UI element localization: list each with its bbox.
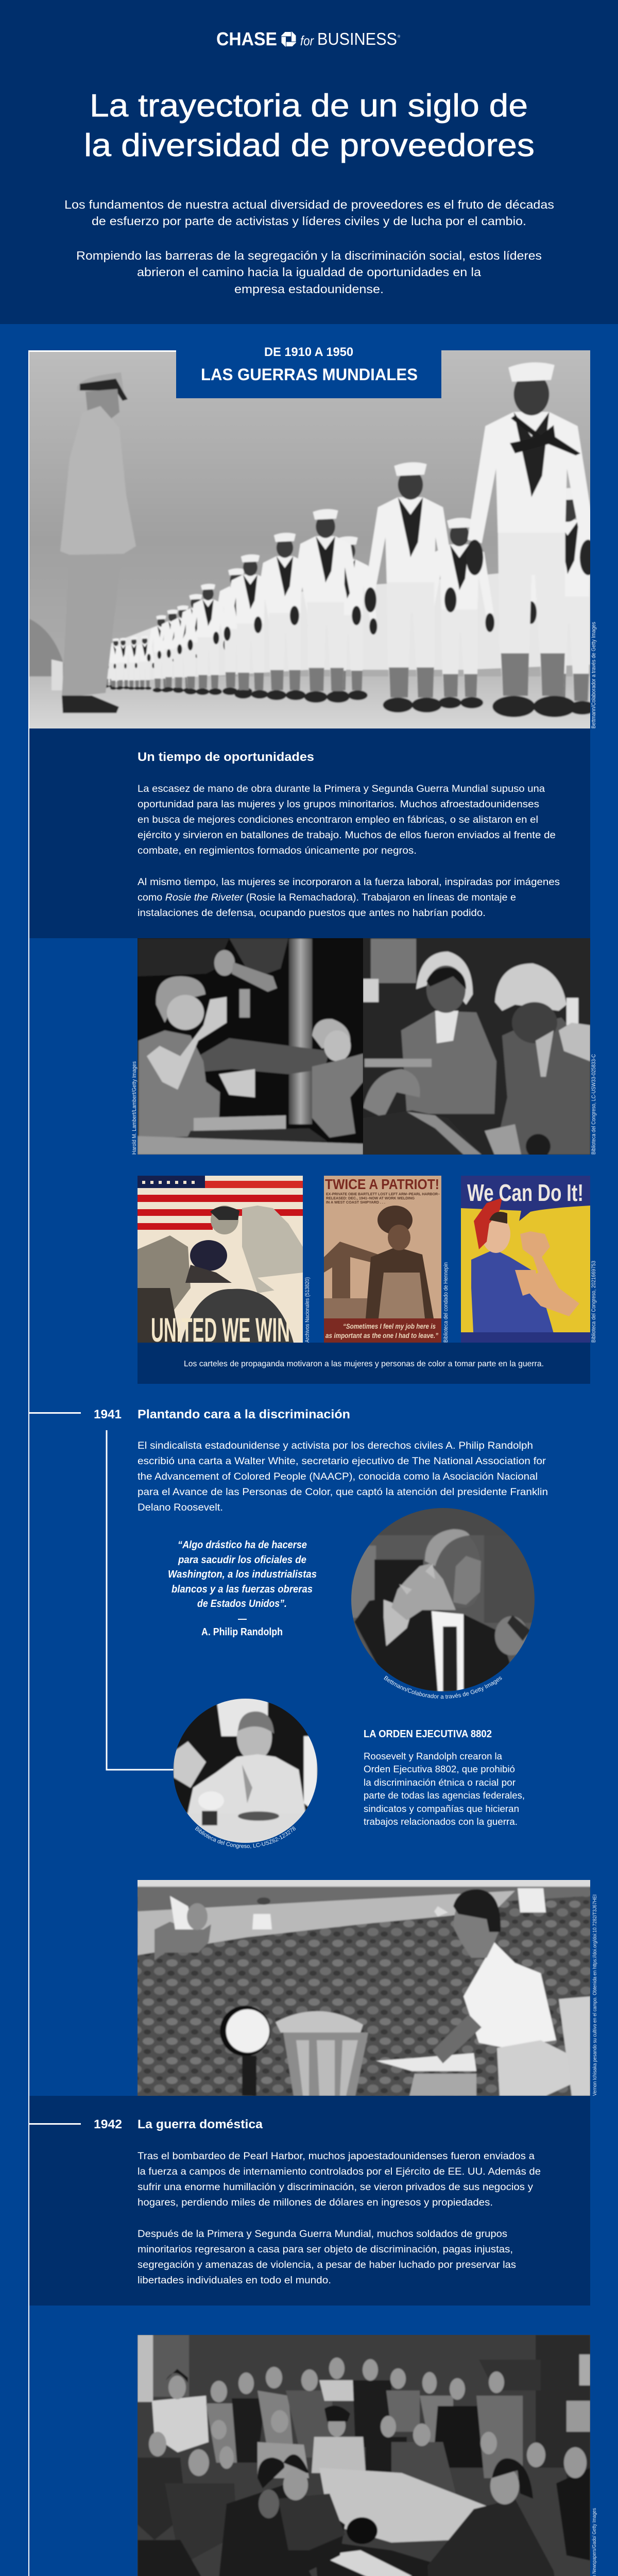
text block: orden ejecutiva: trabajos relacionados con la guerra. [364, 1817, 518, 1827]
text block: Después de la Primera y Segunda Guerra Mundial, muchos soldados de grupos [138, 2229, 507, 2240]
poster lettering: We Can Do It! [467, 1179, 583, 1206]
photo: Roosevelt signing [170, 1695, 322, 1850]
logo: Chase for Business: BUSINESS [317, 29, 397, 48]
timeline marker 1942 [28, 2123, 81, 2125]
poster small text: EX-PRIVATE OBIE BARTLETT LOST LEFT ARM–PEARL HARBOR– [326, 1193, 440, 1196]
text block: orden ejecutiva: parte de todas las agencias federales, [364, 1790, 525, 1801]
text block: minoritarios regresaron a casa para ser objeto de discriminación, pagas injustas, [138, 2244, 513, 2255]
text block: en busca de mejores condiciones encontraron empleo en fábricas, o se alistaron en el [138, 815, 538, 825]
foreground sailor scarf [510, 415, 580, 455]
photo: group of women at a table [134, 2331, 592, 2576]
poster headline: TWICE A PATRIOT! [325, 1176, 439, 1192]
text block: La escasez de mano de obra durante la Primera y Segunda Guerra Mundial supuso una [138, 784, 545, 794]
quote: Randolph: de Estados Unidos”. [197, 1598, 287, 1609]
photo: women at drill press [134, 935, 366, 1157]
top rule [28, 350, 258, 352]
text block: orden ejecutiva: la discriminación étnica o racial por [364, 1777, 516, 1788]
poster small text: RELEASED: DEC., 1941–NOW AT WORK WELDING [326, 1197, 415, 1200]
quote: Randolph: A. Philip Randolph [201, 1626, 283, 1638]
title: la diversidad de proveedores [84, 128, 535, 163]
quote: Randolph: blancos y a las fuerzas obreras [171, 1584, 313, 1595]
photo: women shipyard workers [360, 935, 592, 1159]
poster: Twice a patriot [324, 1176, 441, 1343]
text block [138, 784, 560, 919]
text block 1941: the Advancement of Colored People (NAACP), conocida como la Asociación Nacional [138, 1471, 538, 1482]
title: La trayectoria de un siglo de [90, 88, 528, 124]
text block: segregación y amenazas de violencia, a pesar de haber luchado por preservar las [138, 2260, 516, 2270]
poster: We can do it [461, 1176, 590, 1343]
panel: un tiempo de oportunidades [29, 728, 590, 938]
distant line of sailors [100, 362, 609, 717]
poster credit: Archivos Nacionales (513820) [304, 1277, 311, 1343]
poster lettering: UNITED WE WIN [151, 1311, 290, 1349]
photo: A. Philip Randolph [348, 1504, 538, 1695]
text block: la fuerza a campos de internamiento controlados por el Ejército de EE. UU. Además de [138, 2166, 541, 2177]
quote: Randolph: “Algo drástico ha de hacerse [178, 1539, 307, 1551]
intro paragraph 2: Rompiendo las barreras de la segregación y la discriminación social, estos líderes [76, 249, 542, 262]
subheading: LA ORDEN EJECUTIVA 8802 [364, 1728, 492, 1740]
faces [149, 2358, 587, 2518]
photo credit: Bettmann/Colaborador a través de Getty Images [591, 622, 597, 728]
banner: Las guerras mundiales: DE 1910 A 1950 [264, 345, 353, 359]
panel: la guerra domestica [28, 2096, 590, 2306]
header background [0, 0, 618, 324]
photo credit: Biblioteca del Congreso, LC-USW33-025833-C [591, 1054, 597, 1155]
banner: Las guerras mundiales [176, 344, 441, 398]
poster credit: Biblioteca del Congreso, 2021669753 [591, 1261, 597, 1343]
logo: Chase for Business [216, 28, 401, 49]
text block: instalaciones de defensa, ocupando puestos que antes no habrían podido. [138, 908, 486, 919]
heading: Un tiempo de oportunidades [138, 750, 314, 764]
intro paragraph 2: empresa estadounidense. [234, 282, 384, 296]
text block: hogares, perdiendo miles de millones de dólares en ingresos y propiedades. [138, 2197, 493, 2208]
intro paragraph 1: de esfuerzo por parte de activistas y líderes civiles y de lucha por el cambio. [92, 214, 526, 228]
text block: orden ejecutiva: Roosevelt y Randolph crearon la [364, 1751, 503, 1761]
banner: Las guerras mundiales: LAS GUERRAS MUNDIALES [201, 365, 418, 384]
caption panel [138, 1343, 590, 1384]
text block: como Rosie the Riveter (Rosie la Remachadora). Trabajaron en líneas de montaje e [138, 892, 516, 903]
text block: orden ejecutiva: Orden Ejecutiva 8802, que prohibió [364, 1764, 515, 1774]
photo: sailors marching [26, 348, 609, 732]
intro paragraph 1 [64, 198, 554, 228]
photo: farmer weighing crop [134, 1875, 592, 2099]
text block: libertades individuales en todo el mundo. [138, 2275, 331, 2286]
heading: plantando cara: Plantando cara a la discriminación [138, 1408, 350, 1421]
intro paragraph 2 [76, 249, 542, 296]
intro paragraph 1: Los fundamentos de nuestra actual diversidad de proveedores es el fruto de décadas [64, 198, 554, 211]
text block: oportunidad para las mujeres y los grupos minoritarios. Muchos afroestadounidenses [138, 799, 539, 810]
text block 1941 [138, 1440, 548, 1513]
poster quote: as important as the one I had to leave.” [325, 1331, 438, 1340]
seated and table [138, 2458, 186, 2540]
text block [138, 2151, 541, 2286]
text block: Al mismo tiempo, las mujeres se incorporaron a la fuerza laboral, inspiradas por imágenes [138, 877, 560, 888]
text block 1941: escribió una carta a Walter White, secretario ejecutivo de The National Association for [138, 1456, 546, 1467]
photo credit: Vernon Ichisaka pesando su cultivo en el campo. Obtenida en https://doi.org/doi:10.7282/T3J67HEI [592, 1894, 598, 2096]
photo credit: arc: Biblioteca del Congreso, LC-USZ62-123278 [195, 1826, 296, 1849]
text block: orden ejecutiva: sindicatos y compañías que hicieran [364, 1804, 519, 1814]
text block: Tras el bombardeo de Pearl Harbor, muchos japoestadounidenses fueron enviados a [138, 2151, 535, 2162]
timeline marker 1941 [28, 1412, 81, 1414]
intro paragraph 2: abrieron el camino hacia la igualdad de oportunidades en la [137, 265, 481, 279]
text block: ejército y sirvieron en batallones de trabajo. Muchos de ellos fueron enviados al frente de [138, 830, 556, 841]
text block: sufrir una enorme humillación y discriminación, se vieron privados de sus negocios y [138, 2182, 534, 2193]
photo credit: arc: Bettmann/Colaborador a través de Getty Images [384, 1675, 502, 1699]
text block 1941: Delano Roosevelt. [138, 1502, 223, 1513]
hair and hats [166, 2369, 533, 2499]
poster small text [326, 1193, 440, 1205]
standing row clothes [152, 2396, 209, 2452]
year 1942: 1942 [94, 2117, 122, 2131]
text block 1941: para el Avance de las Personas de Color, que captó la atención del presidente Franklin [138, 1487, 548, 1498]
poster: United we win [138, 1176, 303, 1349]
text block: combate, en regimientos formados únicamente por negros. [138, 845, 417, 856]
poster credit: Biblioteca del condado de Hennepin [443, 1262, 449, 1343]
photo credit: Harold M. Lambert/Lambert/Getty Images [131, 1061, 138, 1155]
icon: Chase octagon [281, 32, 296, 46]
logo: Chase for Business: ® [398, 35, 401, 39]
logo: Chase for Business: CHASE [216, 28, 277, 49]
heading: La guerra doméstica [138, 2117, 263, 2131]
logo: Chase for Business: for [300, 33, 314, 48]
text block: orden ejecutiva [364, 1728, 525, 1827]
title [84, 88, 535, 163]
quote: Randolph [168, 1539, 317, 1638]
timeline spine [28, 350, 29, 2576]
connector line [107, 1430, 174, 1770]
caption panel: Los carteles de propaganda motivaron a las mujeres y personas de color a tomar parte en la guerra. [184, 1360, 544, 1368]
poster small text: IN A WEST COAST SHIPYARD . . . [326, 1201, 385, 1205]
poster quote [325, 1322, 438, 1340]
quote: Randolph: Washington, a los industrialistas [168, 1569, 317, 1580]
quote: Randolph: para sacudir los oficiales de [178, 1554, 306, 1566]
text block 1941: El sindicalista estadounidense y activista por los derechos civiles A. Philip Randolph [138, 1440, 533, 1451]
year 1941: 1941 [94, 1408, 122, 1421]
flag stars [142, 1181, 195, 1184]
poster quote: “Sometimes I feel my job here is [343, 1322, 436, 1330]
officer [77, 373, 123, 391]
